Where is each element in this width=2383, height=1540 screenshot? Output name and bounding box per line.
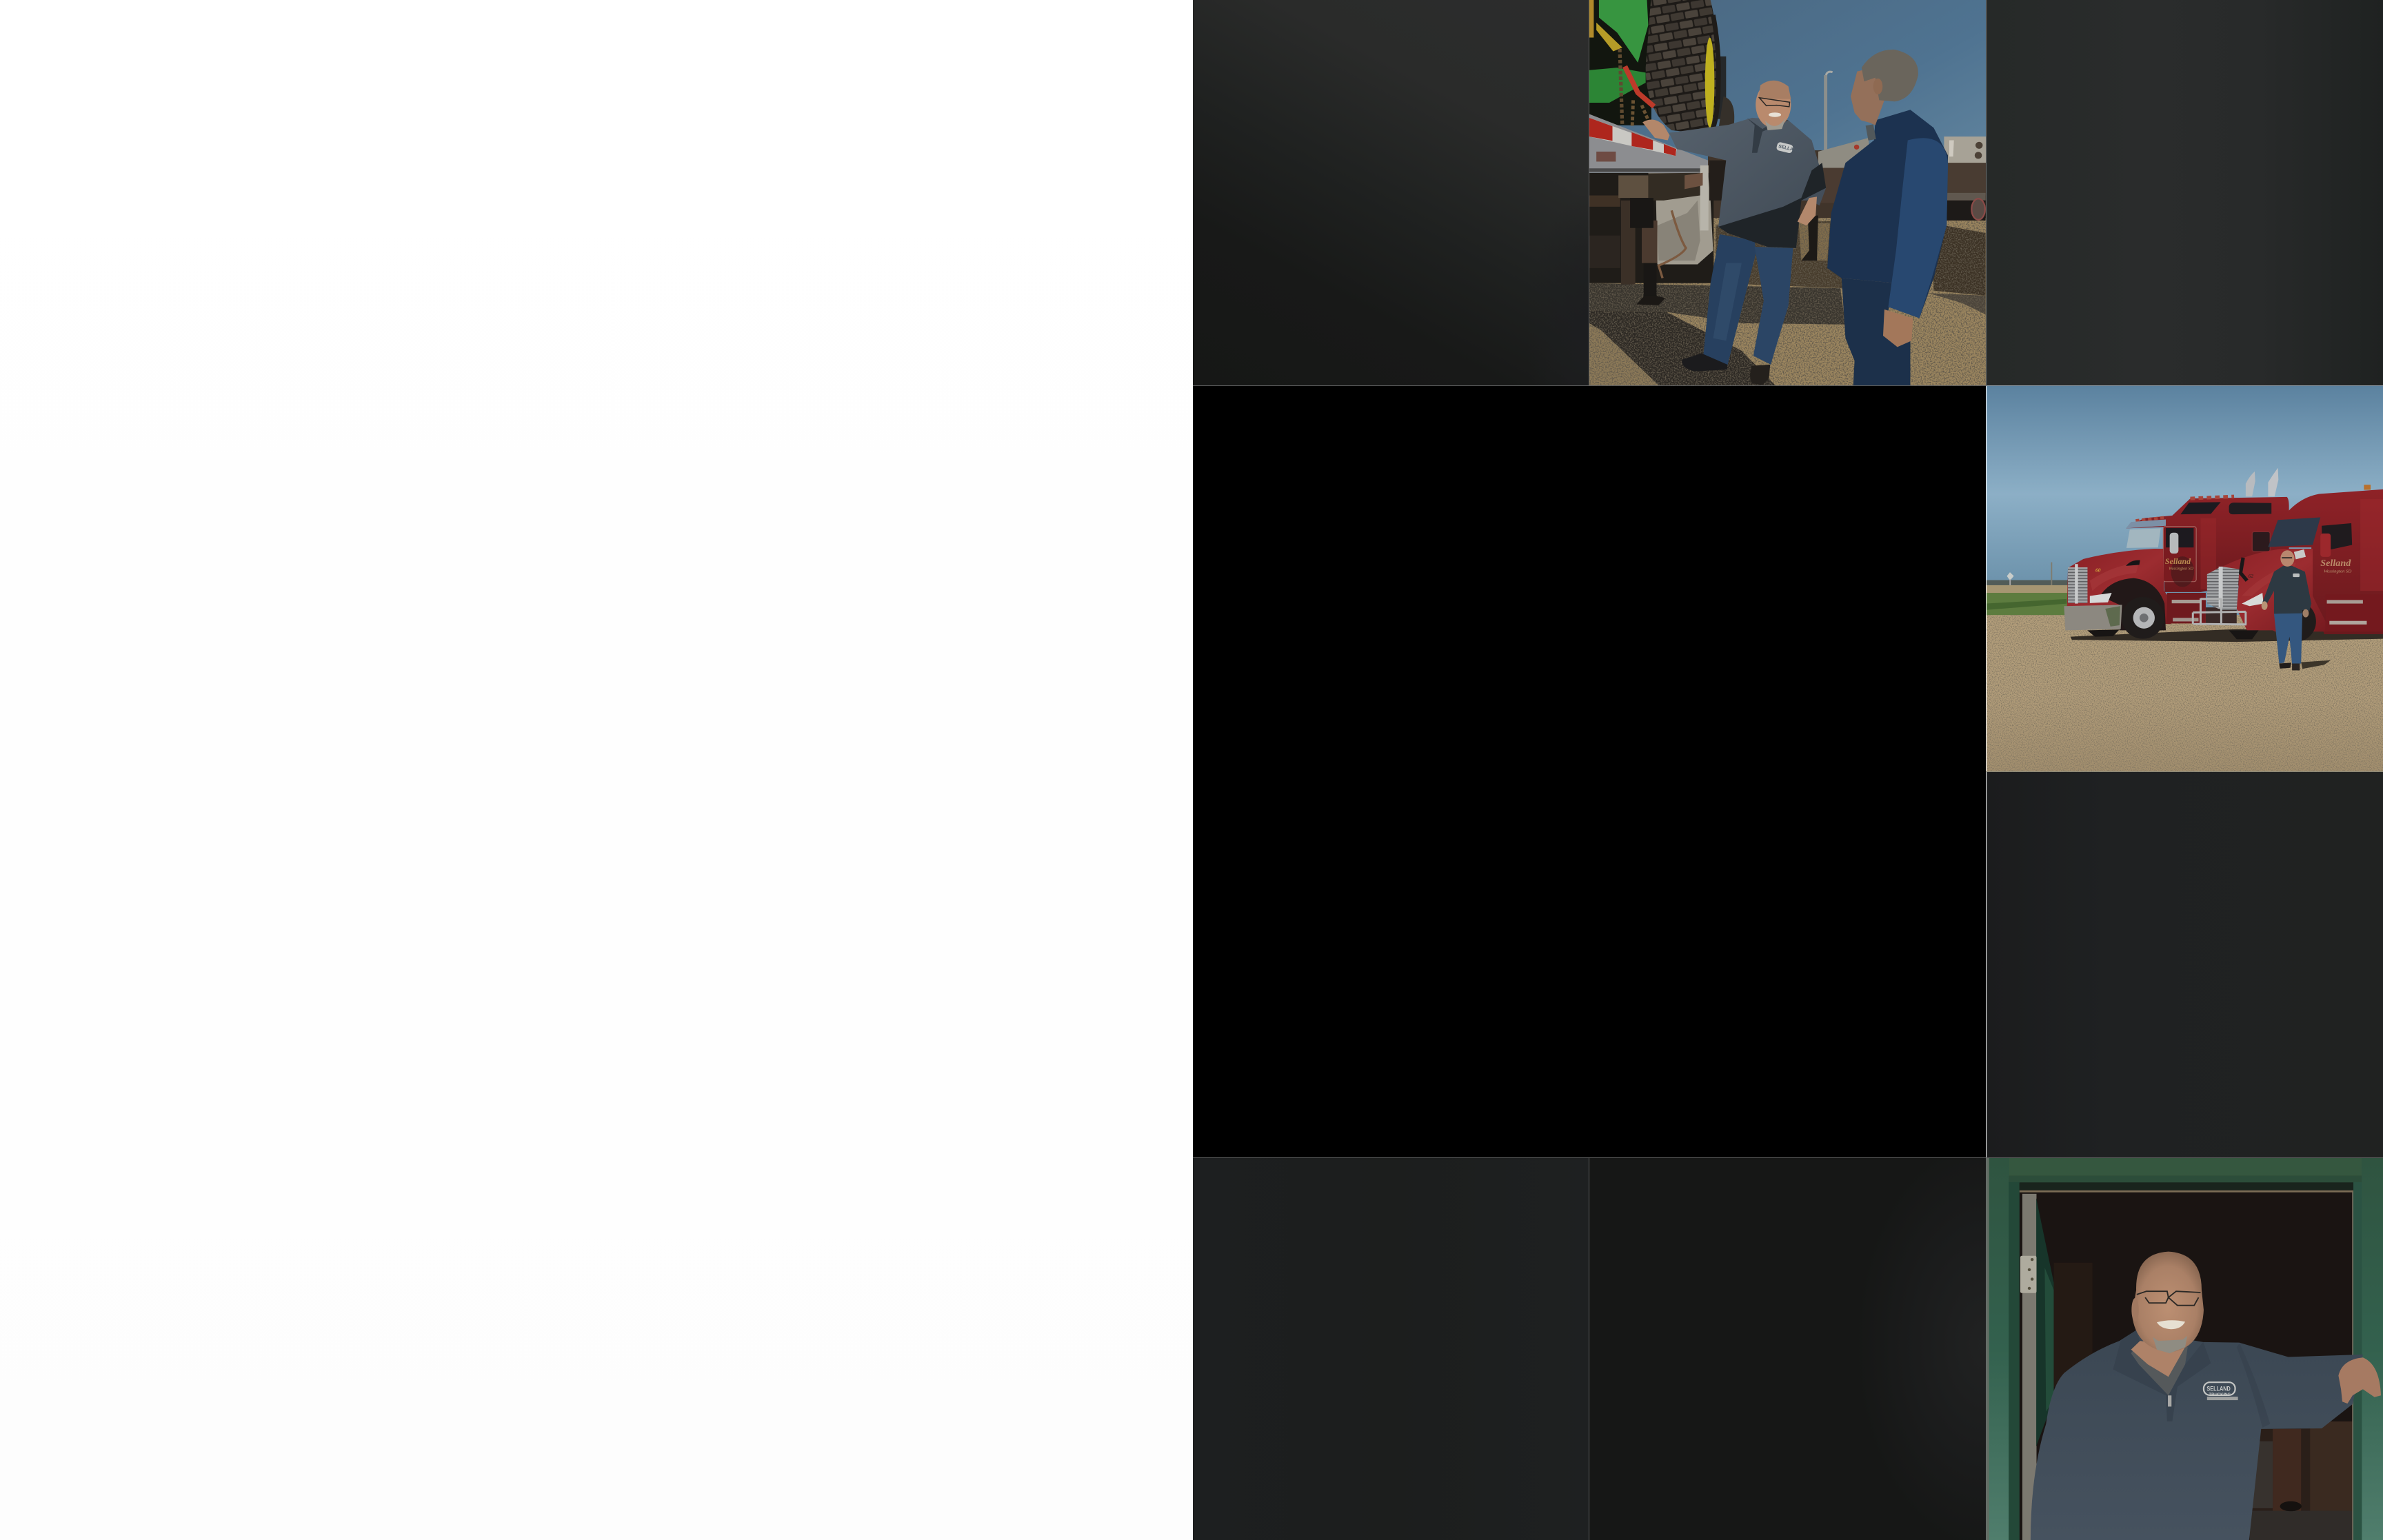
torso: [2262, 566, 2311, 614]
neck and head: [1756, 81, 1791, 128]
shoes: [1682, 353, 1770, 385]
zipper: [2168, 1395, 2171, 1406]
open collar: [2113, 1330, 2211, 1421]
door lettering: Wessington SD: [2324, 569, 2352, 574]
door hinge: [2020, 1256, 2036, 1293]
panel: dark tile bottom left: [1193, 1158, 1589, 1540]
head: [2131, 1252, 2204, 1353]
door lettering: Wessington SD: [2169, 567, 2194, 571]
door lettering: Selland: [2320, 558, 2351, 569]
chest logo: [2204, 1382, 2238, 1400]
tractor tyre: [1646, 0, 1734, 134]
glasses: [2137, 1291, 2200, 1306]
truck 62: 62: [2249, 573, 2253, 579]
front wheel: [2276, 601, 2316, 642]
pullover body: [2031, 1330, 2363, 1540]
door interior: [2019, 1191, 2354, 1540]
room behind man: [2249, 1421, 2353, 1540]
door lettering: [2165, 556, 2194, 571]
hood: [2067, 549, 2171, 624]
hand: [1883, 310, 1913, 347]
backdrop behind figures: [1708, 150, 1988, 223]
goatee: [2153, 1336, 2187, 1353]
chest logo: TRUCKING: [2209, 1392, 2231, 1397]
chest logo: SELLAND: [1778, 144, 1800, 154]
hand on door frame: [2338, 1357, 2381, 1404]
sleeve: [1889, 138, 1948, 318]
tractor body: [1589, 0, 1651, 125]
truck 60: [2064, 468, 2289, 639]
open door edge: [2020, 1194, 2054, 1540]
head: [1851, 66, 1884, 125]
door lettering: [2320, 558, 2352, 574]
flatbed trailer: [1589, 114, 1727, 305]
head: [2280, 550, 2294, 567]
smile: [2157, 1320, 2185, 1329]
jeans: [2274, 613, 2302, 665]
panel: dark tile middle right: [1987, 772, 2383, 1158]
man: [2031, 1252, 2381, 1540]
gravel yard: [1979, 615, 2383, 778]
lamp post and mid trailer: [1801, 72, 1869, 261]
hands: [1642, 120, 1669, 141]
bumper: [2064, 605, 2122, 630]
hood: [2206, 549, 2326, 631]
sleeper and cab: [2126, 497, 2289, 592]
photo: smiling man in green doorway: [1987, 1158, 2383, 1540]
chest logo: SELLAND: [2206, 1386, 2231, 1392]
lower shadow behind guard: [2206, 607, 2237, 625]
pullover: [1669, 118, 1826, 248]
ground: [1586, 218, 1993, 394]
green door frame: [1987, 1158, 2383, 1540]
grille: [2207, 567, 2240, 610]
panel: dark tile top left: [1193, 0, 1589, 386]
torso: [1827, 110, 1948, 318]
grille: [2068, 567, 2087, 603]
hands: [2262, 601, 2268, 610]
photo: two men beside trailer and tractor: [1589, 0, 1986, 385]
sky: [1586, 0, 1993, 225]
man in grey pullover: [1642, 81, 1826, 385]
man walking: [2262, 550, 2311, 670]
wheel arch: [2100, 578, 2166, 630]
truck 60: 60: [2095, 567, 2101, 573]
red chain binder: [1620, 49, 1655, 135]
windshield and visor: [2126, 519, 2166, 528]
man in blue pullover: [1827, 50, 1948, 385]
truck 62: [2193, 485, 2383, 642]
sky: [1979, 379, 2383, 588]
chest logo: [2293, 574, 2300, 577]
shoes: [2279, 662, 2291, 669]
door lettering: Selland: [2165, 556, 2191, 566]
front wheel: [2122, 597, 2164, 639]
brush guard: [2193, 598, 2246, 625]
lower body: [2167, 593, 2206, 623]
horizon: [1987, 563, 2069, 586]
panel: white left column: [0, 0, 1193, 1540]
exhaust stacks: [2246, 468, 2278, 496]
jeans: [1842, 278, 1910, 385]
lower body: [2326, 595, 2383, 631]
door: [2163, 527, 2196, 582]
photo: red semi trucks and man walking: [1987, 386, 2383, 771]
jeans: [1702, 234, 1793, 366]
far trailer: [1944, 136, 1988, 221]
field: [1987, 585, 2069, 618]
sleeper and cab: [2271, 489, 2383, 634]
panel: black block centre: [1193, 386, 1986, 1158]
panel: dark tile bottom middle: [1589, 1158, 1986, 1540]
panel: dark tile top right: [1987, 0, 2383, 386]
